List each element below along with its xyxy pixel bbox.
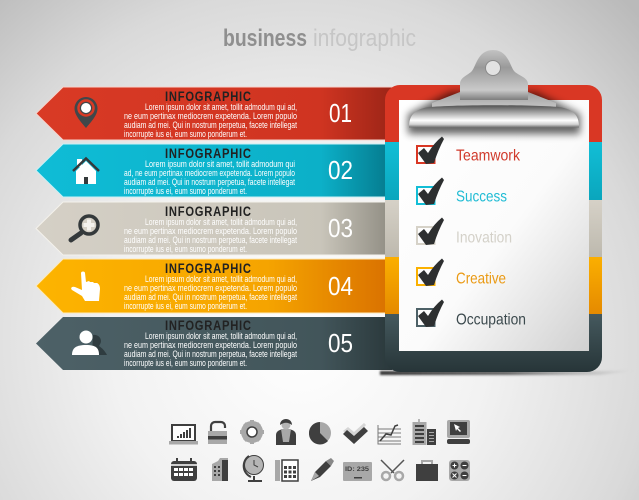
number 05: 05 bbox=[328, 328, 353, 358]
title: infographic bbox=[313, 25, 416, 52]
text block 5 bbox=[124, 331, 297, 369]
label Success: Success bbox=[456, 188, 507, 206]
heading 4: INFOGRAPHIC bbox=[165, 261, 251, 276]
metal clip bbox=[409, 50, 579, 128]
label Inovation: Inovation bbox=[456, 230, 512, 246]
icon: pie chart bbox=[309, 422, 331, 444]
text block 5: incorrupte ius ei, eum sumo ponderum et. bbox=[124, 358, 247, 369]
label Occupation: Occupation bbox=[456, 312, 526, 328]
text block 5: audiam ad mei. Qui in nostrum perpetua, facete intellegat bbox=[124, 349, 297, 360]
icon set bbox=[169, 419, 470, 481]
icon: calendar bbox=[171, 458, 197, 481]
icon: map pin bbox=[74, 97, 98, 128]
icon: pen bbox=[311, 458, 334, 481]
label Teamwork: Teamwork bbox=[456, 148, 521, 164]
text block 2: audiam ad mei. Qui in nostrum perpetua, facete intellegat bbox=[124, 177, 295, 188]
icon: user bbox=[72, 330, 107, 355]
icon: globe bbox=[244, 456, 264, 481]
number 02: 02 bbox=[328, 155, 353, 185]
number 04: 04 bbox=[328, 271, 353, 301]
title: business bbox=[223, 25, 307, 52]
text block 1: incorrupte ius ei, eum sumo ponderum et. bbox=[124, 129, 247, 140]
number 03: 03 bbox=[328, 213, 353, 243]
icon: math symbols bbox=[449, 460, 470, 481]
icon: ID card: ID: 235 bbox=[345, 466, 369, 473]
board: colored bands bbox=[385, 85, 602, 372]
banner 2: teal bbox=[36, 144, 392, 197]
text block 2: Lorem ipsum dolor sit amet, tollit admodum qui bbox=[145, 159, 295, 170]
clipboard bbox=[385, 50, 602, 372]
icon: ID card bbox=[343, 462, 372, 481]
heading 5: INFOGRAPHIC bbox=[165, 318, 251, 333]
icon: buildings bbox=[412, 419, 436, 445]
icon: office building bbox=[212, 458, 228, 481]
icon: open padlock bbox=[208, 422, 227, 444]
text block 2: incorrupte ius ei, eum sumo ponderum et. bbox=[124, 186, 247, 197]
heading 2: INFOGRAPHIC bbox=[165, 146, 251, 161]
clip shadow bbox=[408, 92, 580, 134]
icon: briefcase bbox=[416, 461, 438, 481]
icon: scissors bbox=[381, 460, 404, 480]
check row 4 bbox=[417, 258, 444, 286]
number 01: 01 bbox=[329, 98, 352, 128]
icon: house bbox=[73, 158, 99, 184]
text block 3: ne eum pertinax mediocrem expetenda. Lorem populo bbox=[124, 226, 297, 237]
text block 3 bbox=[124, 217, 297, 255]
text block 1: Lorem ipsum dolor sit amet, tollit admodum qui ad, bbox=[145, 102, 297, 113]
check row 3 bbox=[417, 218, 444, 245]
title bbox=[223, 25, 416, 52]
text block 4: Lorem ipsum dolor sit amet, tollit admodum qui ad, bbox=[145, 274, 297, 285]
icon: check bbox=[343, 423, 368, 444]
check row 1 bbox=[417, 136, 444, 164]
check row 2 bbox=[417, 178, 444, 205]
icon: calculator bbox=[275, 460, 298, 481]
banner 4: yellow bbox=[36, 259, 392, 313]
check row 5 bbox=[417, 300, 444, 327]
banner 1: red bbox=[36, 87, 392, 140]
text block 5: Lorem ipsum dolor sit amet, tollit admodum qui ad, bbox=[145, 331, 297, 342]
text block 4: audiam ad mei. Qui in nostrum perpetua, facete intellegat bbox=[124, 292, 297, 303]
text block 4: ne eum pertinax mediocrem expetenda. Lorem populo bbox=[124, 283, 297, 294]
text block 3: Lorem ipsum dolor sit amet, tollit admodum qui ad, bbox=[145, 217, 297, 228]
text block 1 bbox=[124, 102, 297, 140]
icon: businessman bbox=[276, 419, 296, 445]
icon: computer monitor bbox=[447, 420, 470, 444]
text block 3: audiam ad mei. Qui in nostrum perpetua, facete intellegat bbox=[124, 235, 297, 246]
text block 1: ne eum pertinax mediocrem expetenda. Lorem populo bbox=[124, 111, 297, 122]
text block 4 bbox=[124, 274, 297, 312]
text block 5: ne eum pertinax mediocrem expetenda. Lorem populo bbox=[124, 340, 297, 351]
banner 5: dark slate bbox=[36, 317, 392, 370]
paper bbox=[399, 100, 589, 351]
text block 3: incorrupte ius ei, eum sumo ponderum et. bbox=[124, 244, 247, 255]
icon: laptop chart bbox=[169, 425, 198, 444]
text block 2: ad, ne eum pertinax mediocrem expetenda. Lorem populo bbox=[124, 168, 295, 179]
text block 1: audiam ad mei. Qui in nostrum perpetua, facete intellegat bbox=[124, 120, 297, 131]
icon: pointing hand bbox=[71, 272, 100, 301]
icon: gear bbox=[240, 420, 264, 444]
label Creative: Creative bbox=[456, 270, 506, 288]
icon: line chart bbox=[378, 425, 401, 444]
text block 4: incorrupte ius ei, eum sumo ponderum et. bbox=[124, 301, 247, 312]
heading 1: INFOGRAPHIC bbox=[165, 89, 251, 104]
text block 2 bbox=[124, 159, 295, 197]
banner 3: beige bbox=[36, 202, 392, 255]
heading 3: INFOGRAPHIC bbox=[165, 204, 251, 219]
board shadow bbox=[380, 370, 636, 375]
icon: magnifier bbox=[71, 216, 98, 240]
